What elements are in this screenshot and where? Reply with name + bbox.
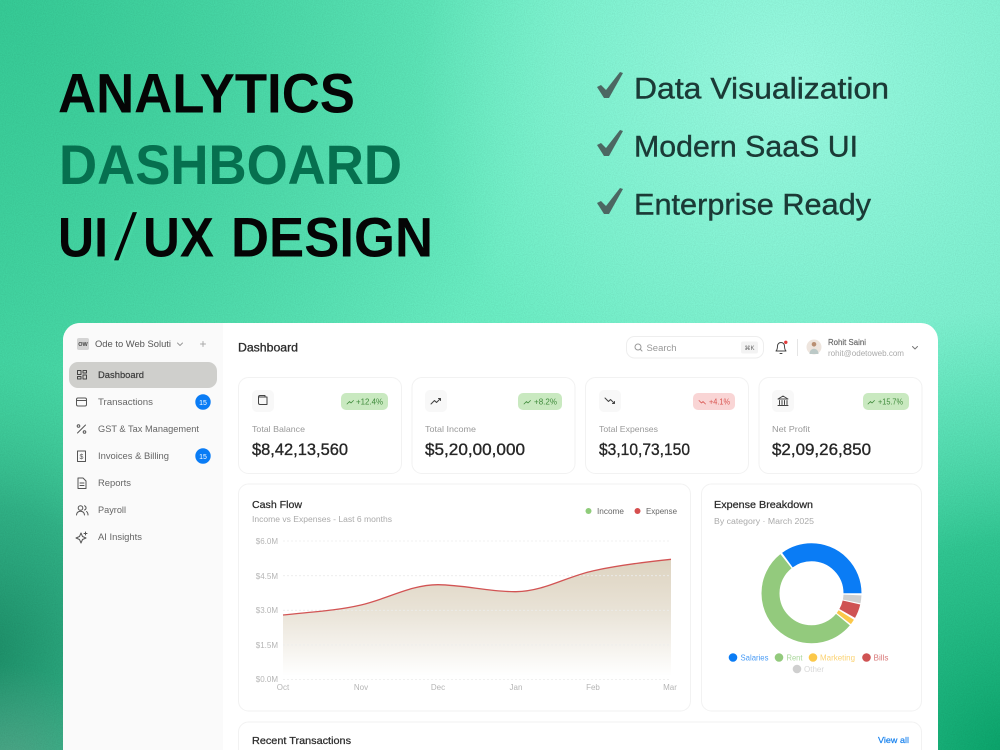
- nav: dashboard selected: [69, 362, 217, 388]
- panel: cash flow chart: [238, 484, 690, 711]
- chart legend: Expense: [646, 507, 678, 516]
- user profile: rohit@odetoweb.com: [828, 349, 904, 358]
- panel: expense breakdown: [702, 484, 922, 711]
- area chart: Jan: [510, 683, 522, 692]
- nav: transactions: 15: [199, 400, 207, 407]
- area chart: Mar: [663, 683, 677, 692]
- workspace switcher: [77, 338, 206, 350]
- stat card: total income: Total Income: [425, 424, 476, 434]
- area chart: [256, 537, 677, 692]
- nav: invoices and billing: 15: [199, 454, 207, 461]
- stat card: net profit: +15.7%: [878, 398, 903, 406]
- area chart: Dec: [431, 683, 445, 692]
- stat card: net profit: Net Profit: [772, 424, 811, 434]
- nav: payroll: [76, 505, 126, 516]
- area chart: Nov: [354, 683, 368, 692]
- title: DASHBOARD: [59, 133, 402, 196]
- area chart: $4.5M: [256, 572, 278, 581]
- area chart: $3.0M: [256, 606, 278, 615]
- nav: ai insights: [76, 532, 142, 543]
- search box: [626, 336, 764, 358]
- workspace switcher: OW: [78, 342, 89, 348]
- stat card: total balance: $8,42,13,560: [252, 440, 348, 459]
- nav: reports: [78, 478, 131, 489]
- area chart: $0.0M: [256, 675, 278, 684]
- panel: recent transactions: Recent Transactions: [252, 735, 351, 747]
- nav: invoices and billing: Invoices & Billing: [98, 451, 169, 462]
- panel: expense breakdown: Expense Breakdown: [714, 499, 813, 511]
- page heading: Dashboard: [238, 340, 298, 354]
- stat card: total balance: Total Balance: [252, 424, 305, 434]
- feature: data visualization: Data Visualization: [634, 72, 889, 106]
- donut legend: Rent: [786, 654, 803, 662]
- panel: cash flow chart: Income vs Expenses - Last 6 months: [252, 515, 392, 524]
- area chart: Feb: [586, 683, 600, 692]
- area chart: $6.0M: [256, 537, 278, 546]
- donut legend: Bills: [874, 654, 888, 662]
- stat card: total expenses: Total Expenses: [599, 424, 658, 434]
- stat card: total balance: +12.4%: [356, 398, 383, 406]
- title: DESIGN: [231, 206, 433, 268]
- title: ANALYTICS: [58, 62, 355, 124]
- panel: recent transactions: View all: [878, 735, 909, 745]
- panel: cash flow chart: Cash Flow: [252, 499, 302, 511]
- stat card: total balance: [238, 378, 402, 474]
- title: UI: [58, 206, 108, 268]
- donut legend: Other: [804, 665, 824, 674]
- nav: gst and tax: GST & Tax Management: [98, 424, 199, 435]
- user profile: [806, 338, 918, 358]
- nav: payroll: Payroll: [98, 505, 126, 516]
- donut legend: Salaries: [740, 654, 768, 662]
- donut legend: Marketing: [820, 654, 855, 662]
- title: /: [112, 199, 140, 276]
- dashboard window: [63, 323, 938, 750]
- donut legend: [729, 653, 888, 674]
- feature checklist: [597, 72, 889, 222]
- icon: notification bell: [776, 341, 788, 354]
- stat card: net profit: $2,09,26,850: [772, 440, 871, 459]
- nav: invoices and billing: [78, 448, 211, 464]
- chart legend: Income: [597, 507, 625, 516]
- stat card: total expenses: +4.1%: [709, 398, 730, 406]
- area chart: $1.5M: [256, 641, 278, 650]
- search box: ⌘K: [744, 345, 755, 352]
- panel: sidebar: [63, 323, 217, 544]
- stat card: total expenses: [586, 378, 748, 474]
- nav: transactions: Transactions: [98, 397, 153, 408]
- nav: invoices and billing: $: [80, 454, 84, 461]
- area chart: Oct: [277, 683, 290, 692]
- feature: modern saas ui: Modern SaaS UI: [634, 130, 858, 164]
- feature: enterprise ready: Enterprise Ready: [634, 188, 871, 222]
- panel: recent transactions: [238, 722, 922, 750]
- chart legend: [586, 508, 677, 516]
- nav: dashboard selected: Dashboard: [98, 370, 144, 381]
- stat card: total income: [412, 378, 575, 474]
- nav: reports: Reports: [98, 478, 131, 489]
- user profile: Rohit Saini: [828, 338, 866, 347]
- workspace switcher: Ode to Web Soluti: [95, 339, 171, 350]
- search box: Search: [646, 343, 676, 353]
- stat card: total income: $5,20,00,000: [425, 440, 525, 459]
- donut chart: [770, 552, 852, 634]
- title: UX: [143, 206, 214, 268]
- nav: ai insights: AI Insights: [98, 532, 142, 543]
- panel: expense breakdown: By category · March 2025: [714, 517, 815, 526]
- title: [58, 62, 433, 276]
- stat card: total expenses: $3,10,73,150: [599, 440, 690, 459]
- stat card: net profit: [759, 378, 922, 474]
- nav: transactions: [76, 394, 211, 410]
- stat card: total income: +8.2%: [534, 398, 557, 406]
